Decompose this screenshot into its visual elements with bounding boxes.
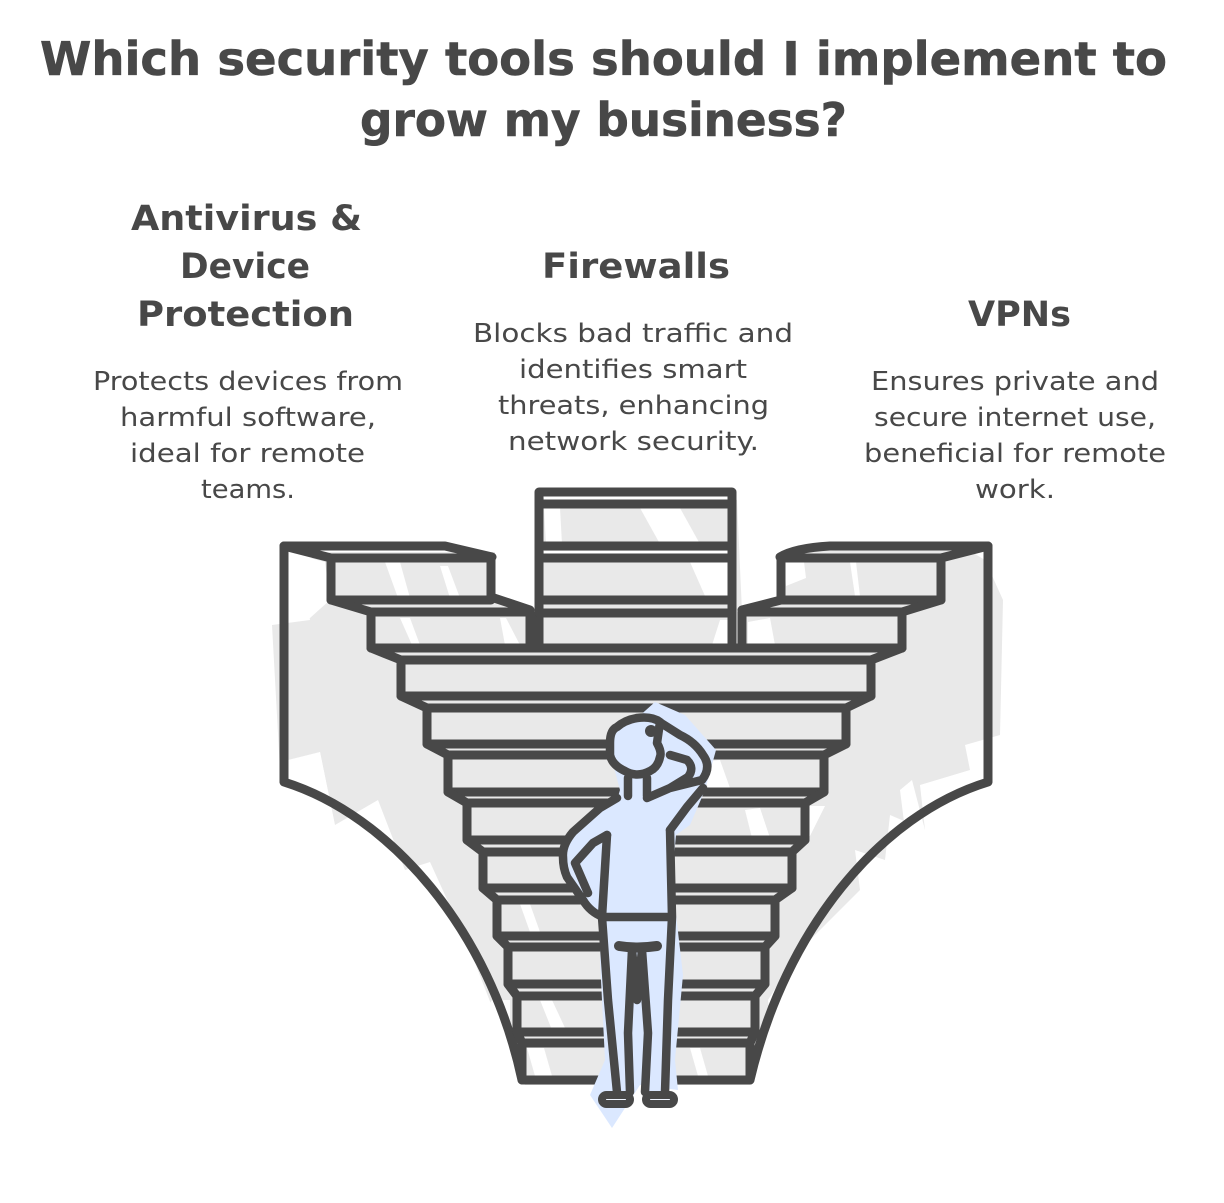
text block: firewalls description: threats, enhancing	[498, 391, 769, 421]
heading: antivirus and device protection: Device	[180, 247, 310, 287]
title: grow my business?	[360, 93, 847, 147]
text block: antivirus description: Protects devices from	[93, 367, 403, 397]
outer curve left	[284, 546, 522, 1080]
text block: vpns description: work.	[975, 475, 1055, 505]
text block: firewalls description	[473, 319, 793, 457]
staircase: left steps	[284, 546, 530, 648]
staircase: central descending steps	[371, 648, 902, 1080]
panel: antivirus and device protection text	[93, 199, 403, 505]
staircase: center tower	[539, 492, 732, 648]
staircase: right steps	[742, 546, 988, 648]
outer curve right	[750, 546, 988, 1080]
text block: antivirus description: ideal for remote	[130, 439, 365, 469]
heading: vpns: VPNs	[968, 295, 1071, 335]
heading: antivirus and device protection	[131, 199, 362, 335]
heading: firewalls: Firewalls	[542, 247, 730, 287]
panel: vpns text	[864, 295, 1166, 505]
heading: antivirus and device protection: Protection	[137, 295, 354, 335]
icon: thinking person seen from behind	[563, 702, 716, 1128]
person neck	[628, 778, 647, 796]
person legs and torso outline	[602, 830, 672, 1092]
text block: firewalls description: identifies smart	[519, 355, 747, 385]
text block: vpns description	[864, 367, 1166, 505]
person fill	[563, 720, 708, 1092]
person raised arm	[647, 723, 707, 798]
title	[40, 32, 1167, 147]
text block: vpns description: secure internet use,	[874, 403, 1156, 433]
blue hachure behind person	[590, 702, 716, 1128]
person hand	[645, 725, 657, 737]
text block: antivirus description	[93, 367, 403, 505]
person torso right edge	[670, 788, 703, 830]
text block: firewalls description: Blocks bad traffic and	[473, 319, 793, 349]
title: Which security tools should I implement to	[40, 32, 1167, 86]
panel: firewalls text	[473, 247, 793, 457]
heading: antivirus and device protection: Antivirus &	[131, 199, 362, 239]
text block: vpns description: Ensures private and	[871, 367, 1159, 397]
text block: antivirus description: harmful software,	[120, 403, 376, 433]
person crotch bar	[619, 946, 657, 948]
person left arm on hip	[563, 798, 617, 917]
hachure fill of staircase	[272, 488, 1003, 1085]
person feet	[602, 1095, 674, 1104]
white gaps	[288, 496, 985, 1085]
person head	[610, 718, 661, 774]
chart: three staircase paths converging	[272, 488, 1003, 1085]
text block: vpns description: beneficial for remote	[864, 439, 1166, 469]
text block: antivirus description: teams.	[201, 475, 295, 505]
text block: firewalls description: network security.	[508, 427, 759, 457]
